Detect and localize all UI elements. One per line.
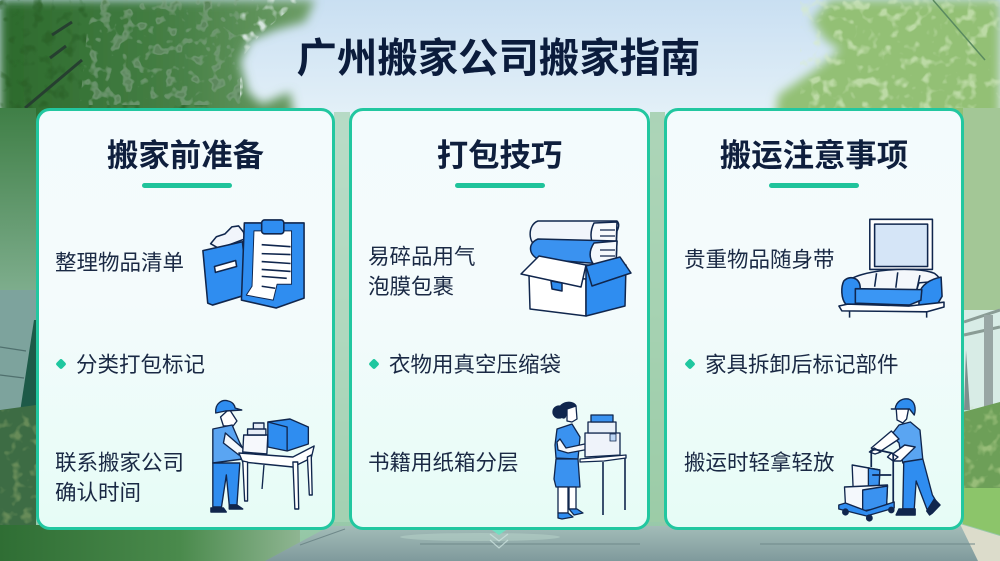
- text: 搬运时轻拿轻放: 搬运时轻拿轻放: [684, 451, 835, 475]
- text: 联系搬家公司确认时间: [55, 451, 184, 505]
- text: 易碎品用气泡膜包裹: 泡膜包裹: [368, 275, 454, 299]
- text: 联系搬家公司确认时间: 确认时间: [55, 481, 141, 505]
- icon: worker with hand truck: [838, 398, 941, 522]
- bullet: [55, 358, 67, 370]
- heading: 搬运注意事项: 搬运注意事项: [720, 138, 908, 173]
- panel: 搬家前准备: [36, 108, 335, 530]
- text: 分类打包标记: 分类打包标记: [76, 353, 205, 377]
- icon: worker packing at table: [210, 400, 315, 513]
- left tree canopy: [0, 0, 315, 125]
- text: 易碎品用气泡膜包裹: [368, 245, 476, 299]
- text: 衣物用真空压缩袋: 衣物用真空压缩袋: [389, 353, 561, 377]
- icon: books in open box: [520, 220, 632, 317]
- text: 联系搬家公司确认时间: 联系搬家公司: [55, 451, 184, 475]
- right building and bush: [963, 310, 1000, 410]
- heading underline: [455, 183, 545, 188]
- text: 易碎品用气泡膜包裹: 易碎品用气: [368, 245, 476, 269]
- text: 整理物品清单: 整理物品清单: [55, 251, 184, 275]
- heading underline: [142, 183, 232, 188]
- panel: 搬运注意事项: [664, 108, 964, 530]
- heading: 搬家前准备: 搬家前准备: [107, 138, 264, 173]
- strip tints between panels: [334, 112, 350, 522]
- text: 家具拆卸后标记部件: 家具拆卸后标记部件: [705, 353, 899, 377]
- text: 书籍用纸箱分层: 书籍用纸箱分层: [368, 451, 519, 475]
- icon: sofa and television: [838, 218, 945, 318]
- bullet: [684, 358, 696, 370]
- bullet: [368, 358, 380, 370]
- icon: woman packing box: [552, 402, 627, 520]
- icon: clipboard and folder: [202, 219, 305, 309]
- heading: 打包技巧: 打包技巧: [437, 138, 562, 173]
- ground: [0, 525, 300, 561]
- panel: 打包技巧: [349, 108, 650, 530]
- heading underline: [769, 183, 859, 188]
- text: 贵重物品随身带: 贵重物品随身带: [684, 248, 835, 272]
- right tree canopy: [775, 0, 1000, 125]
- chevrons: [490, 534, 508, 548]
- left building and bush: [0, 290, 36, 418]
- title: 广州搬家公司搬家指南: [297, 35, 700, 81]
